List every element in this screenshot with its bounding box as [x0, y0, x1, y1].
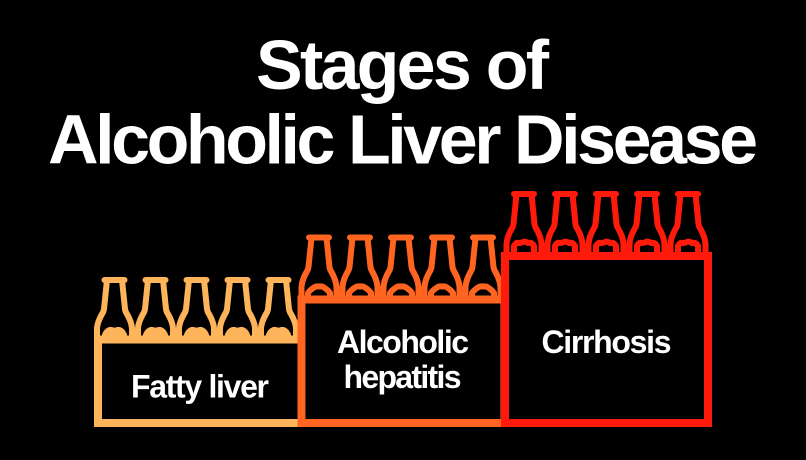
panel: cirrhosis crate	[505, 194, 708, 423]
panel: fatty liver crate	[97, 280, 302, 423]
label: fatty liver: Fatty liver	[131, 368, 269, 404]
icon: alcoholic hepatitis bottles	[302, 238, 500, 298]
label: cirrhosis: Cirrhosis	[542, 324, 672, 360]
label: alcoholic hepatitis	[337, 324, 469, 395]
icon: cirrhosis bottles	[506, 194, 706, 254]
crate: alcoholic hepatitis	[302, 300, 504, 423]
icon: fatty liver bottles	[97, 280, 296, 338]
label: alcoholic hepatitis: hepatitis	[344, 359, 462, 395]
panel: alcoholic hepatitis crate	[302, 238, 504, 423]
crate: fatty liver	[98, 340, 302, 423]
title: Alcoholic Liver Disease	[48, 100, 758, 178]
title: Stages of	[256, 26, 550, 104]
title	[48, 26, 758, 178]
label: alcoholic hepatitis: Alcoholic	[337, 324, 469, 360]
crate: cirrhosis	[505, 256, 708, 423]
